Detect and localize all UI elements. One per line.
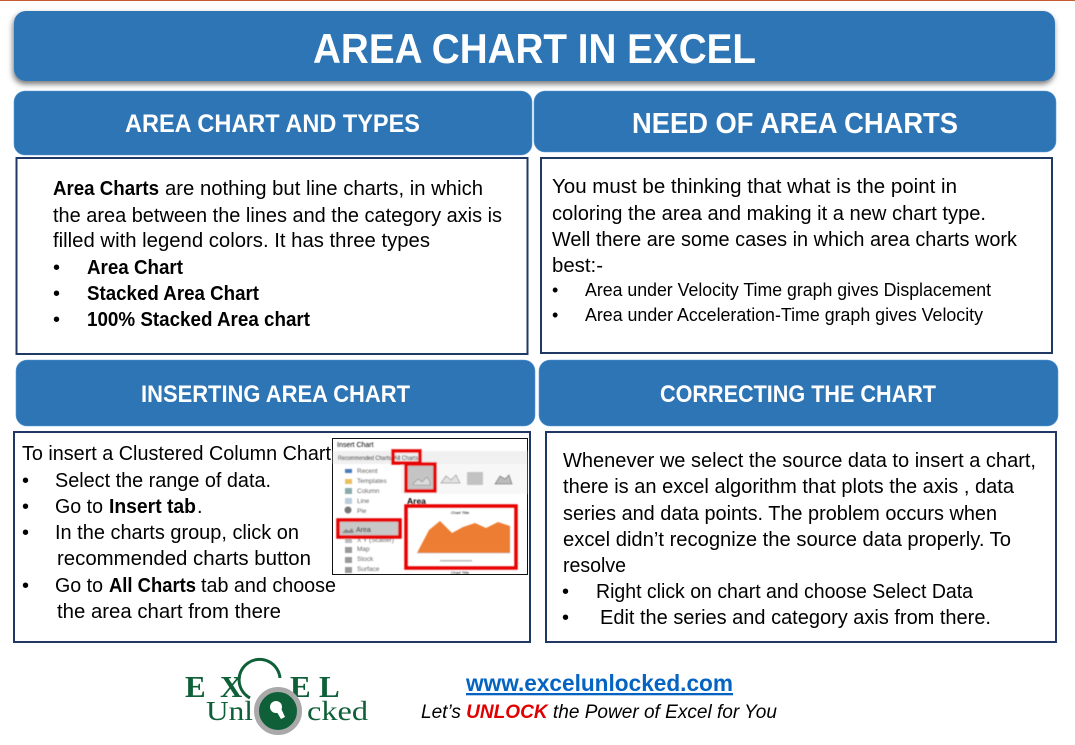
screenshot: Insert Chart dialog: Column	[357, 488, 380, 495]
steps text: Go to	[55, 496, 103, 518]
use cases list: •	[552, 305, 558, 325]
heading: correcting the chart: CORRECTING THE CHART	[660, 381, 936, 408]
list of chart types: •	[53, 257, 60, 279]
intro text: Area Charts	[53, 178, 159, 200]
website link: www.excelunlocked.com	[465, 670, 733, 696]
heading: inserting area chart	[16, 360, 535, 426]
title banner	[14, 11, 1055, 81]
explanation text: Well there are some cases in which area charts work	[552, 229, 1018, 251]
heading: area chart and types: AREA CHART AND TYPES	[125, 110, 420, 138]
screenshot: Insert Chart dialog: Insert Chart	[337, 442, 374, 449]
steps list: •	[562, 581, 569, 603]
steps list	[562, 581, 991, 629]
steps text: Select the range of data.	[55, 470, 271, 492]
list of chart types	[53, 257, 310, 331]
logo: Excel Unlocked: Unl	[206, 696, 253, 726]
steps text: recommended charts button	[57, 548, 311, 570]
remaining steps text: •	[22, 575, 29, 597]
heading: need of area charts	[534, 91, 1056, 152]
list of chart types: •	[53, 283, 60, 305]
explanation text: best:-	[552, 255, 603, 277]
screenshot: Insert Chart dialog	[332, 438, 528, 575]
screenshot: Insert Chart dialog: Pie	[357, 508, 367, 515]
screenshot: Insert Chart dialog: Recent	[357, 468, 378, 475]
heading: area chart and types	[14, 91, 532, 155]
screenshot: Insert Chart dialog: Stock	[357, 556, 374, 563]
steps text: To insert a Clustered Column Chart	[22, 443, 331, 465]
list of chart types: Stacked Area Chart	[87, 283, 259, 305]
panel: inserting area chart	[14, 432, 530, 642]
list of chart types: •	[53, 309, 60, 331]
screenshot: Insert Chart dialog: Area	[356, 527, 371, 534]
remaining steps text: Go to	[55, 575, 103, 597]
logo: Excel Unlocked: E	[290, 669, 311, 704]
logo: Excel Unlocked: E	[185, 669, 206, 704]
steps text: Insert tab	[109, 496, 196, 518]
screenshot: Insert Chart dialog: Area	[407, 496, 426, 506]
tagline: Let’s UNLOCK the Power of Excel for You	[421, 701, 777, 723]
steps text: •	[22, 496, 29, 518]
website and tagline	[421, 670, 777, 723]
explanation text	[563, 450, 1036, 577]
logo: Excel Unlocked	[185, 659, 369, 732]
steps text	[22, 443, 331, 570]
heading: inserting area chart: INSERTING AREA CHART	[141, 381, 410, 408]
list of chart types: 100% Stacked Area chart	[87, 309, 310, 331]
panel: need of area charts	[541, 158, 1052, 353]
use cases list: •	[552, 280, 558, 300]
use cases list: Area under Velocity Time graph gives Displacement	[585, 280, 991, 300]
explanation text: Whenever we select the source data to insert a chart,	[563, 450, 1036, 472]
use cases list: Area under Acceleration-Time graph gives Velocity	[585, 305, 983, 325]
logo: Excel Unlocked: cked	[307, 696, 369, 726]
explanation text: coloring the area and making it a new chart type.	[552, 203, 986, 225]
steps list: Edit the series and category axis from there.	[600, 607, 991, 629]
remaining steps text: tab and choose	[201, 575, 336, 597]
logo: Excel Unlocked: X	[220, 669, 243, 704]
screenshot: Insert Chart dialog: Templates	[357, 478, 387, 485]
intro text: are nothing but line charts, in which	[165, 178, 483, 200]
logo: Excel Unlocked: L	[319, 669, 340, 704]
remaining steps text	[22, 575, 336, 623]
steps list: •	[562, 607, 569, 629]
screenshot: Insert Chart dialog: X Y (Scatter)	[357, 537, 394, 544]
explanation text: excel didn’t recognize the source data properly. To	[563, 529, 1011, 551]
title banner: AREA CHART IN EXCEL	[313, 25, 756, 72]
heading: correcting the chart	[539, 360, 1058, 426]
panel: correcting the chart	[546, 432, 1056, 642]
explanation text	[552, 176, 1018, 277]
screenshot: Insert Chart dialog: Line	[357, 498, 370, 505]
explanation text: resolve	[563, 555, 626, 577]
steps text: •	[22, 470, 29, 492]
remaining steps text: the area chart from there	[57, 601, 281, 623]
screenshot: Insert Chart dialog: Recommended Charts	[338, 455, 392, 462]
steps text: In the charts group, click on	[55, 522, 299, 544]
steps list: Right click on chart and choose Select Data	[596, 581, 974, 603]
explanation text: there is an excel algorithm that plots the axis , data	[563, 476, 1015, 498]
intro text: the area between the lines and the category axis is	[53, 205, 502, 227]
screenshot: Insert Chart dialog: Chart Title	[451, 570, 470, 575]
screenshot: Insert Chart dialog: Chart Title	[451, 510, 470, 515]
use cases list	[552, 280, 991, 325]
screenshot: Insert Chart dialog: Surface	[357, 566, 380, 573]
explanation text: series and data points. The problem occurs when	[563, 503, 997, 525]
red highlight boxes	[338, 451, 516, 568]
screenshot: Insert Chart dialog: All Charts	[394, 456, 418, 462]
list of chart types: Area Chart	[87, 257, 183, 279]
intro text: filled with legend colors. It has three types	[53, 230, 430, 252]
remaining steps text: All Charts	[109, 575, 196, 597]
steps text: •	[22, 522, 29, 544]
screenshot: Insert Chart dialog: Map	[357, 546, 370, 553]
panel: area chart and types	[16, 158, 528, 354]
heading: need of area charts: NEED OF AREA CHARTS	[632, 108, 958, 140]
intro text	[53, 178, 502, 252]
explanation text: You must be thinking that what is the point in	[552, 176, 957, 198]
steps text: .	[197, 496, 203, 518]
